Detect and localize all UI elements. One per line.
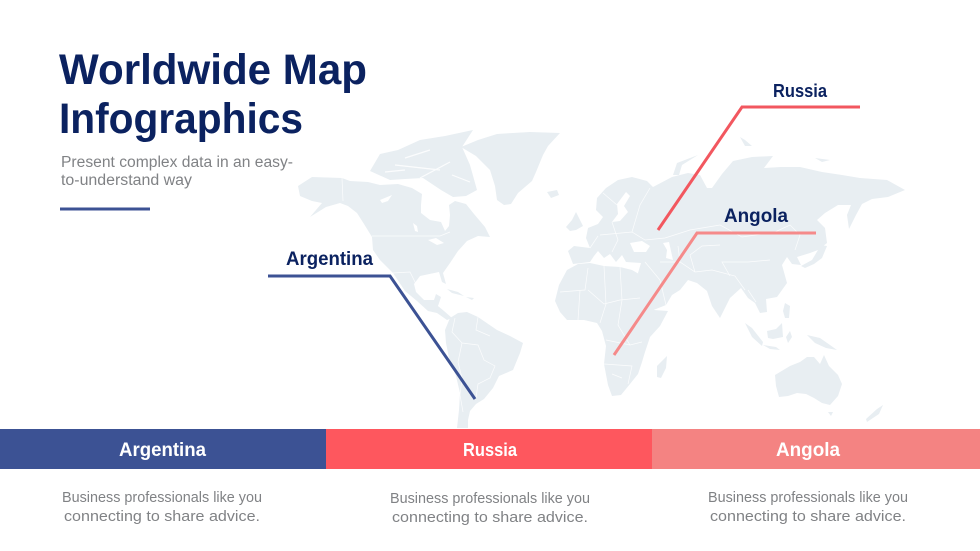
description: Russia: Business professionals like you <box>390 490 590 507</box>
map label: Argentina: Argentina <box>286 249 373 270</box>
subtitle: to-understand way <box>61 172 192 189</box>
description: Argentina <box>62 489 262 525</box>
panel: Angola <box>652 429 980 525</box>
title: Worldwide Map <box>59 46 367 94</box>
Arctic islands <box>370 130 477 197</box>
subtitle <box>61 154 293 189</box>
Novaya Zemlya and arctic Russia islands <box>673 137 830 175</box>
description: Angola: connecting to share advice. <box>710 508 906 525</box>
header bar: Russia <box>326 429 652 469</box>
Iceland <box>547 190 559 198</box>
callout line: Russia <box>658 107 860 230</box>
North America <box>298 177 490 320</box>
description: Russia <box>390 490 590 526</box>
Africa <box>555 263 668 396</box>
callout line: Argentina <box>268 276 475 399</box>
Greenland <box>461 132 560 205</box>
description: Argentina: connecting to share advice. <box>64 508 260 525</box>
description: Argentina: Business professionals like you <box>62 489 262 506</box>
description: Angola <box>708 489 908 525</box>
title: Infographics <box>59 95 303 143</box>
header text: Angola: Angola <box>776 440 840 461</box>
Madagascar <box>657 356 667 378</box>
callout line: Angola <box>614 233 816 355</box>
inland waters <box>380 192 673 260</box>
map label: Russia: Russia <box>773 81 828 101</box>
description: Angola: Business professionals like you <box>708 489 908 506</box>
title <box>59 46 367 143</box>
header text: Russia: Russia <box>463 440 518 460</box>
panel: Argentina <box>0 429 326 525</box>
panel: Russia <box>326 429 652 526</box>
header bar: Argentina <box>0 429 326 469</box>
Southeast Asian islands <box>745 303 837 350</box>
header text: Argentina: Argentina <box>119 440 206 461</box>
header bar: Angola <box>652 429 980 469</box>
description: Russia: connecting to share advice. <box>392 509 588 526</box>
Australia <box>775 355 842 405</box>
map label: Angola: Angola <box>724 206 788 227</box>
Caribbean islands <box>447 289 474 300</box>
South America <box>445 312 523 428</box>
Europe and Asia <box>568 156 905 318</box>
Japan <box>801 245 827 268</box>
world map <box>298 130 905 428</box>
Great Britain <box>566 212 583 231</box>
subtitle: Present complex data in an easy- <box>61 154 293 171</box>
title rule <box>60 208 150 210</box>
country borders <box>342 150 800 412</box>
Tasmania and New Zealand <box>828 405 883 422</box>
